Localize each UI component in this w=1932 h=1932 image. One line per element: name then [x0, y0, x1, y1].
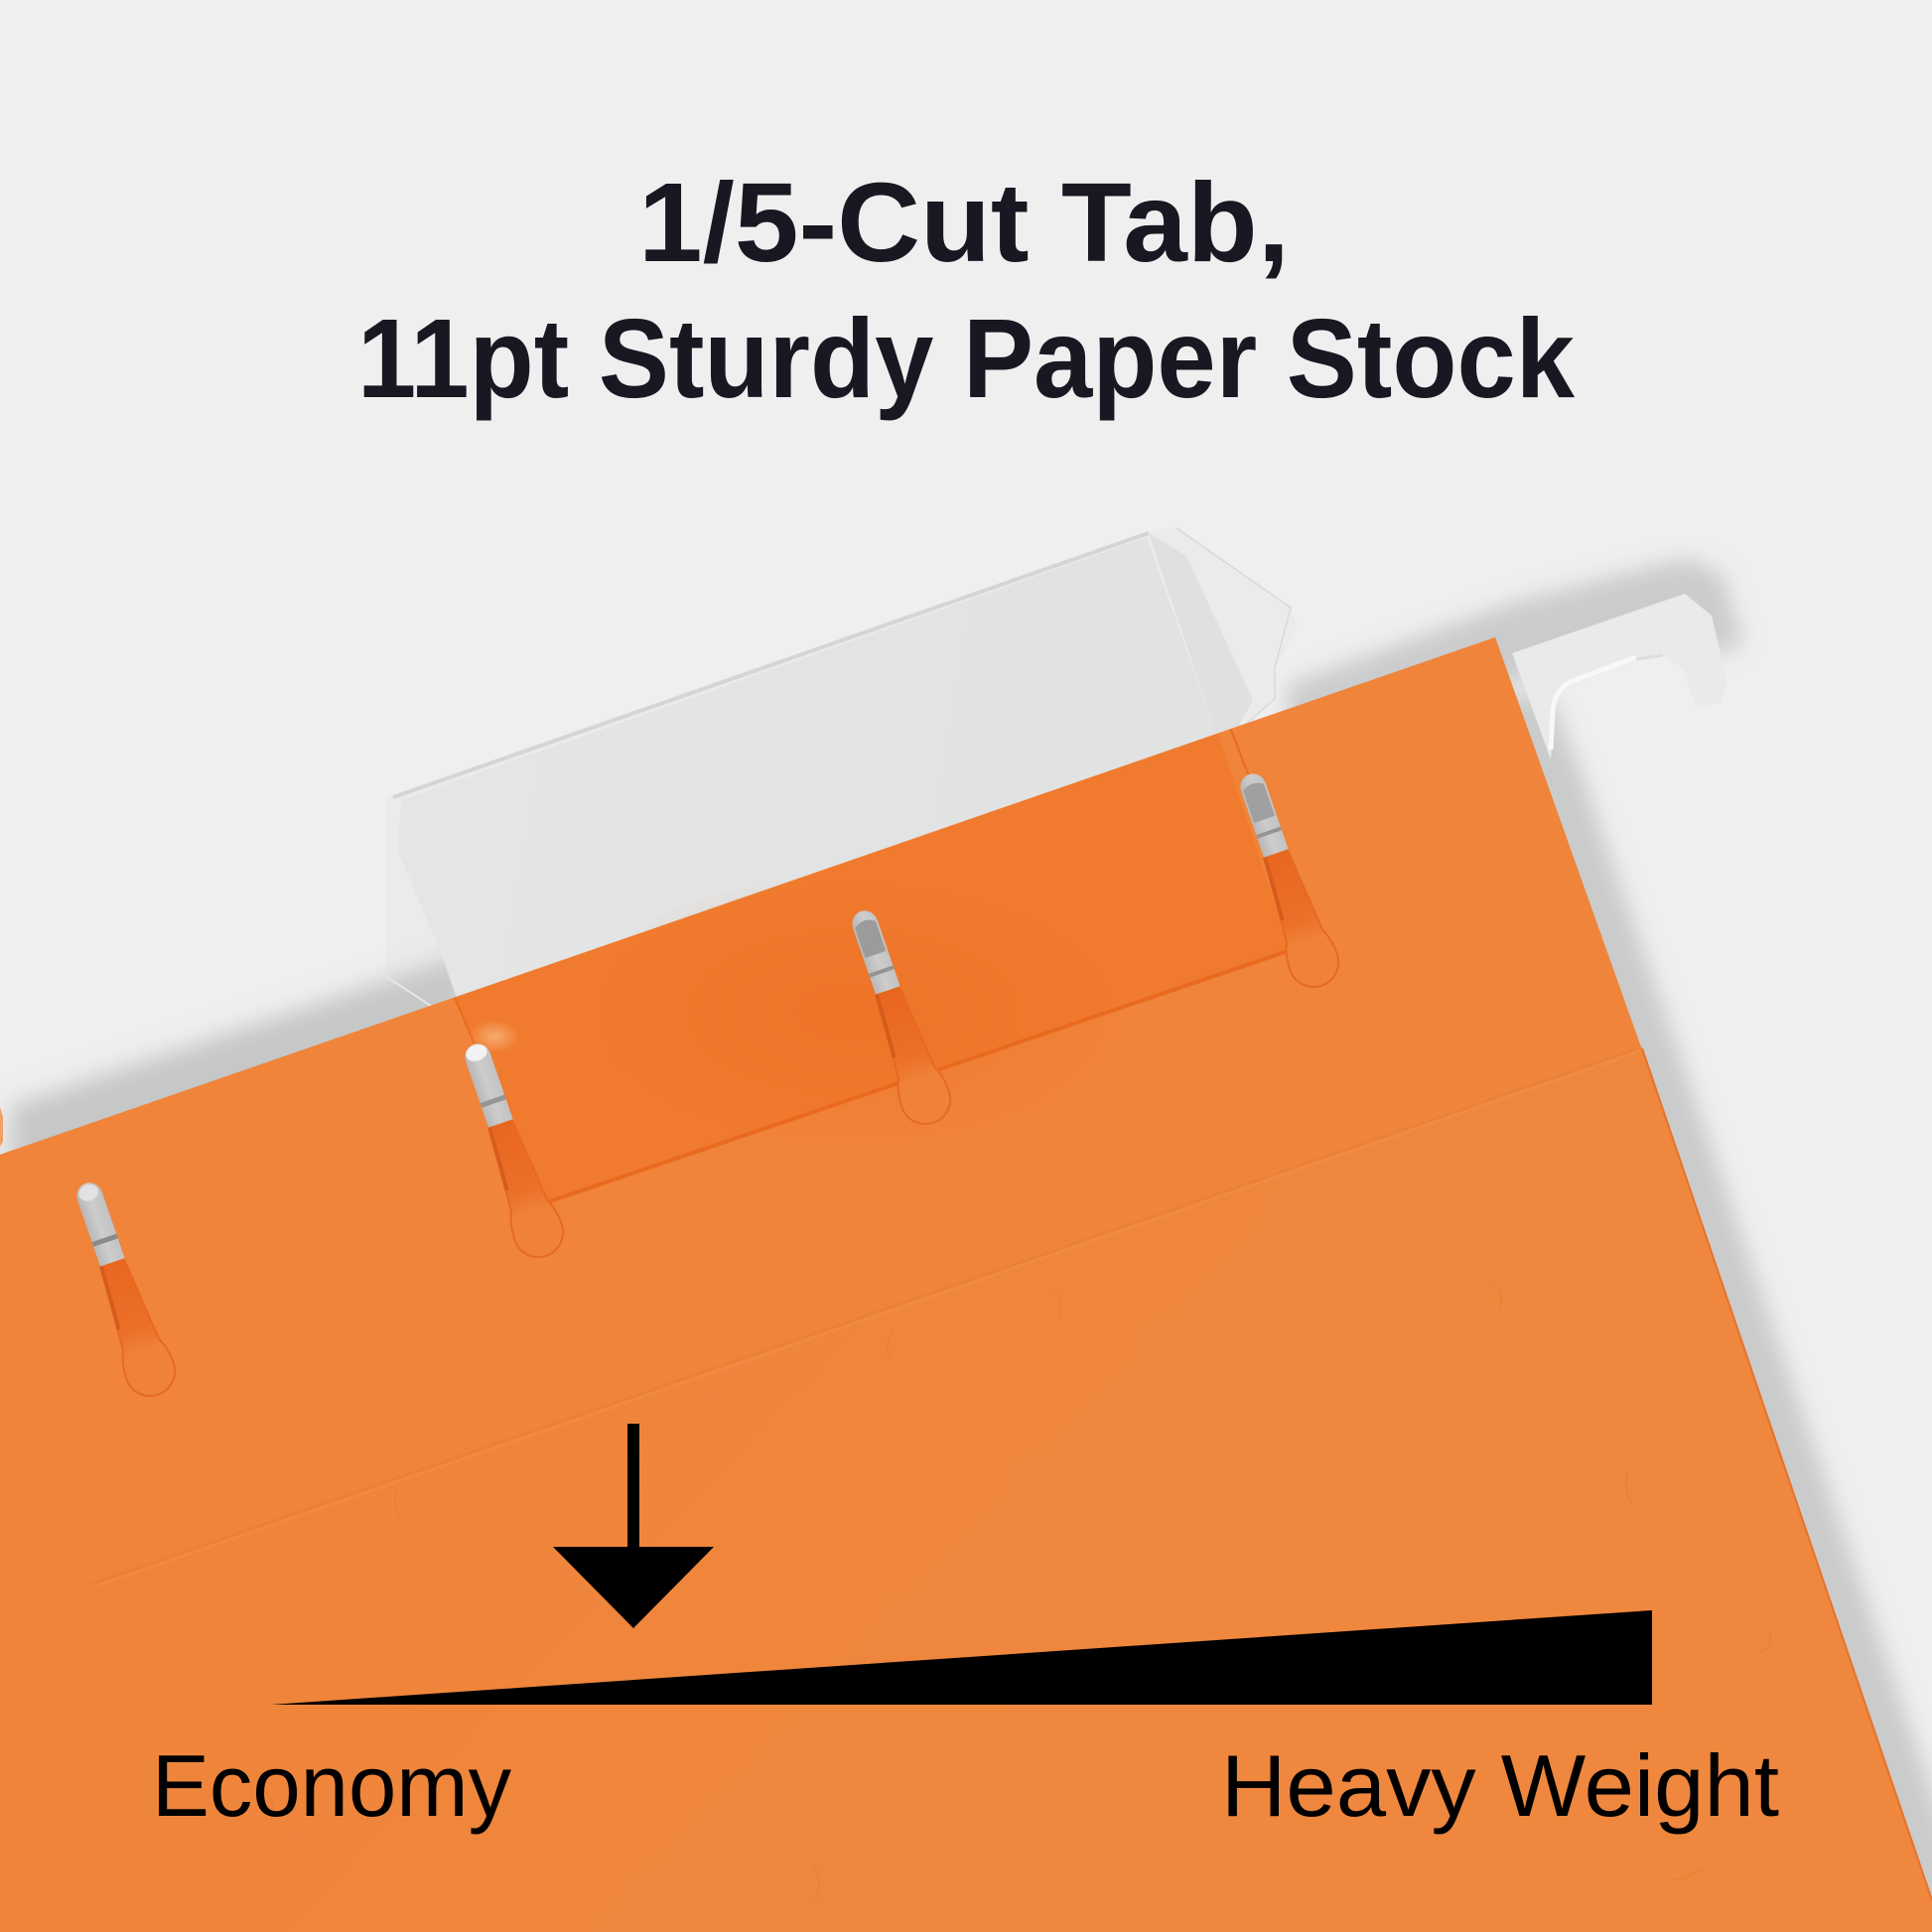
- tab right strip: [1149, 533, 1253, 740]
- hanger hook: [1512, 594, 1727, 759]
- title: 1/5-Cut Tab,: [638, 160, 1290, 285]
- slot 4: [1225, 766, 1345, 994]
- arrow pointing to economy position: [553, 1424, 714, 1628]
- slot 3: [837, 903, 957, 1131]
- folder edge tint: [1642, 1048, 1932, 1900]
- tab overlay seen through folder: [455, 734, 1291, 1203]
- folder upper band: [0, 637, 1640, 1615]
- tab paper insert: [398, 537, 1218, 998]
- overlay dark spot: [576, 874, 1132, 1152]
- slot 1: [62, 1175, 182, 1403]
- tab top edge: [393, 533, 1149, 797]
- tab bottom fold line: [544, 950, 1291, 1203]
- orange hanging folder: [0, 637, 1932, 1932]
- shadow of folder over left background and sleeve: [10, 953, 467, 1201]
- slot 2: [450, 1036, 570, 1264]
- tab clear outer sleeve: [385, 526, 1298, 1008]
- glow near slot: [469, 1020, 520, 1053]
- title: 11pt Sturdy Paper Stock: [357, 296, 1575, 421]
- left sliver of next folder: [0, 1107, 3, 1147]
- folder drop shadows: [1287, 558, 1932, 1932]
- label: Heavy Weight: Heavy Weight: [1221, 1736, 1779, 1835]
- tab edges through folder: [455, 998, 475, 1044]
- paper fibres: [258, 1281, 1771, 1902]
- weight scale wedge: [271, 1610, 1652, 1705]
- label: Economy: Economy: [152, 1736, 511, 1835]
- title: [357, 160, 1575, 421]
- plastic tab insert: [10, 526, 1298, 1201]
- folder body: [0, 637, 1932, 1932]
- folder fold line: [92, 1047, 1640, 1584]
